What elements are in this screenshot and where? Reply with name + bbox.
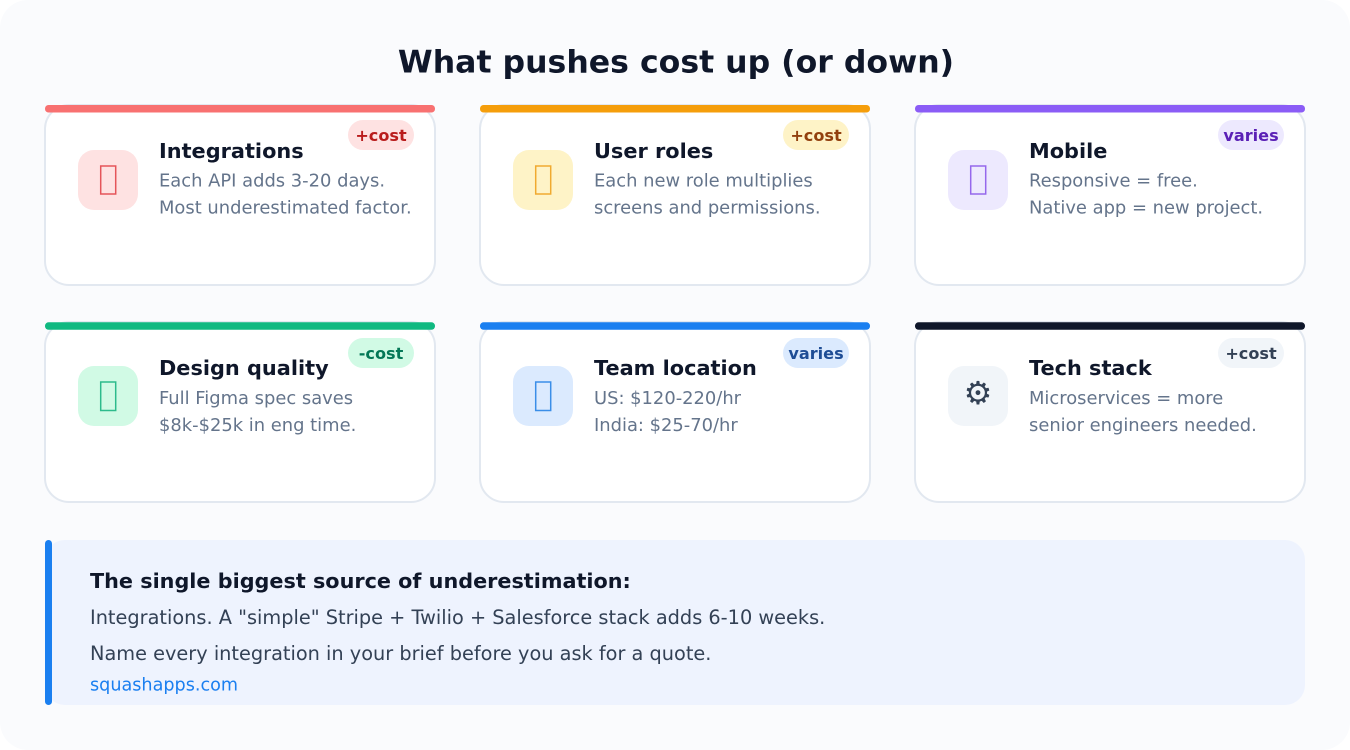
description: integrations [159, 170, 412, 218]
icon: tech stack [948, 366, 1008, 426]
description: integrations: Each API adds 3-20 days. [159, 170, 385, 192]
description: design quality: $8k-$25k in eng time. [159, 415, 356, 436]
icon: mobile [948, 150, 1008, 210]
description: tech stack [1029, 388, 1257, 436]
panel: mobile [915, 105, 1305, 285]
panel: team location [480, 322, 870, 502]
panel: user roles [480, 105, 870, 285]
icon: tech stack: ⚙ [964, 374, 992, 412]
callout [45, 540, 1305, 705]
heading: mobile: Mobile [1029, 139, 1107, 163]
description: tech stack: senior engineers needed. [1029, 415, 1257, 436]
description: mobile [1029, 170, 1263, 218]
badge: +cost: +cost [1225, 344, 1277, 363]
heading: user roles: User roles [594, 139, 713, 163]
icon: team location [513, 366, 573, 426]
callout heading: The single biggest source of underestimation: [90, 569, 631, 593]
badge: +cost [348, 120, 414, 150]
icon: user roles [513, 150, 573, 210]
description: design quality: Full Figma spec saves [159, 388, 353, 409]
source link: squashapps.com [90, 676, 238, 696]
description: user roles: screens and permissions. [594, 198, 821, 218]
badge: +cost [1218, 338, 1284, 368]
description: integrations: Most underestimated factor. [159, 198, 412, 218]
badge: -cost [348, 338, 414, 368]
heading: integrations: Integrations [159, 139, 304, 163]
description: team location: US: $120-220/hr [594, 388, 742, 409]
description: design quality [159, 388, 356, 436]
description: mobile: Responsive = free. [1029, 170, 1198, 192]
callout text: Integrations. A "simple" Stripe + Twilio + Salesforce stack adds 6-10 weeks. [90, 606, 825, 629]
callout text: Name every integration in your brief before you ask for a quote. [90, 642, 711, 665]
badge: varies [783, 338, 849, 368]
badge: -cost: -cost [359, 344, 404, 363]
badge: +cost: +cost [355, 126, 407, 145]
description: user roles: Each new role multiplies [594, 170, 813, 192]
heading: design quality: Design quality [159, 356, 329, 380]
description: team location: India: $25-70/hr [594, 415, 738, 436]
badge: +cost [783, 120, 849, 150]
panel: integrations [45, 105, 435, 285]
panel: tech stack [915, 322, 1305, 502]
description: tech stack: Microservices = more [1029, 388, 1223, 409]
description: mobile: Native app = new project. [1029, 198, 1263, 218]
callout text [90, 606, 825, 665]
title: What pushes cost up (or down) [398, 44, 954, 80]
panel: design quality [45, 322, 435, 502]
badge: varies: varies [1223, 126, 1279, 145]
badge: varies: varies [788, 344, 844, 363]
heading: team location: Team location [594, 356, 757, 380]
badge: +cost: +cost [790, 126, 842, 145]
icon: integrations [78, 150, 138, 210]
badge: varies [1218, 120, 1284, 150]
icon: design quality [78, 366, 138, 426]
heading: tech stack: Tech stack [1029, 356, 1153, 380]
description: team location [594, 388, 742, 436]
description: user roles [594, 170, 821, 218]
